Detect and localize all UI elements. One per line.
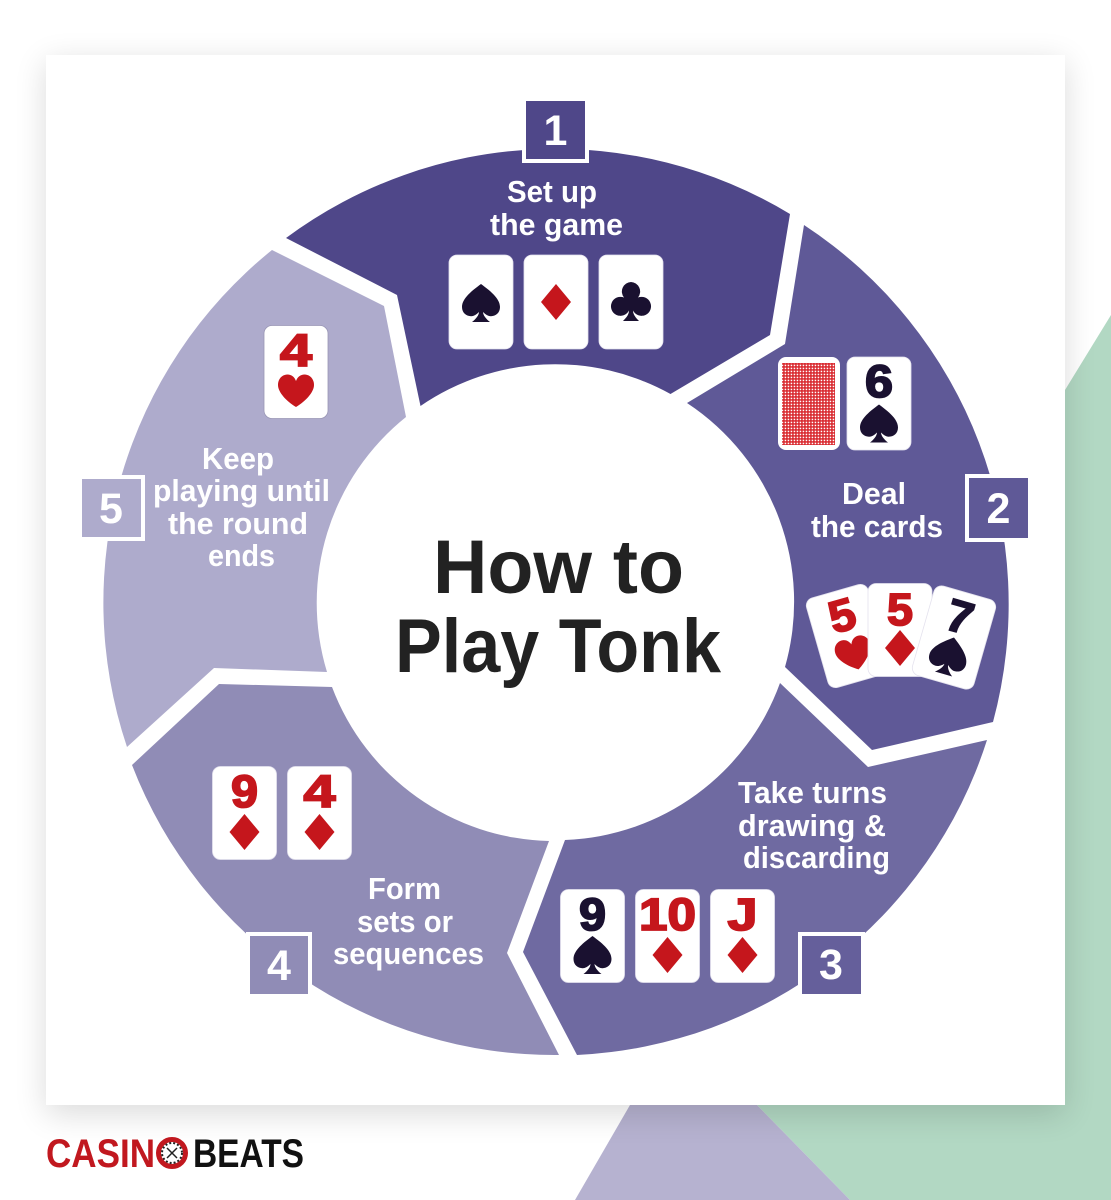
card: 9 of diamonds: 9 [231,766,258,817]
step 4 number badge [248,934,310,996]
panel: step 2 segment [687,225,1009,750]
step 5 number badge [80,477,143,539]
card: 9 of spades: 9 [579,889,606,940]
card: 7 of spades, fanned: 7 [940,589,979,645]
label: step 3: Take turns [738,776,887,810]
card: 9 of diamonds [212,766,276,860]
label: step 4: sequences [333,937,484,971]
label: step 5 [153,442,330,573]
label: step 5: playing until [153,474,330,508]
card: spade suit [449,255,513,349]
label: step 3: discarding [743,841,890,875]
card: 4 of diamonds: 4 [304,766,336,817]
label: step 1 [490,175,623,242]
label: step 5: ends [208,539,275,573]
step 3 number badge [800,934,863,996]
label: step 4: Form [368,872,441,906]
title: Play Tonk [395,604,722,689]
step 5 number badge: 5 [99,485,123,533]
step 2 number badge: 2 [987,485,1010,533]
label: step 3 [738,776,890,875]
panel: step 3 segment [523,683,987,1055]
logo: CasinoBeats: BEATS [193,1132,304,1176]
panel: step 1 segment [286,149,790,406]
background shape: green [700,315,1111,1200]
card: jack of diamonds [710,889,774,982]
label: step 2 [811,477,943,544]
label: step 5: the round [168,507,308,541]
card: 5 of hearts, fanned [804,582,892,690]
logo: CasinoBeats: CASIN [46,1132,155,1176]
card: 5 of diamonds, fanned [868,584,932,676]
label: step 1: Set up [507,175,597,209]
card: 10 of diamonds [636,889,700,982]
card: 4 of hearts [264,325,328,418]
card: diamond suit [524,255,588,349]
step 4 number badge: 4 [267,942,291,990]
card: jack of diamonds: J [728,889,757,940]
card: 10 of diamonds: 10 [639,889,696,940]
step 2 number badge [967,476,1030,540]
card: 4 of hearts: 4 [280,325,312,376]
card: 4 of diamonds [288,766,352,860]
panel: step 5 segment [103,250,406,747]
logo: CasinoBeats [46,1132,304,1176]
card: face-down deck back [778,357,840,450]
background shape: lavender [575,1105,850,1200]
label: step 2: Deal [842,477,906,511]
label: step 5: Keep [202,442,274,476]
step 3 number badge: 3 [819,941,843,989]
label: step 4: sets or [357,905,453,939]
label: step 2: the cards [811,510,943,544]
panel: step 4 segment [132,684,559,1055]
card: 9 of spades [560,889,624,982]
card: 6 of spades: 6 [865,356,893,407]
card: 7 of spades, fanned [910,584,998,691]
label: step 1: the game [490,208,623,242]
label: step 4 [333,872,484,971]
label: step 3: drawing & [738,809,886,843]
title [395,525,722,689]
title: How to [433,525,684,610]
step 1 number badge: 1 [544,107,567,155]
card: 6 of spades [847,356,911,450]
step 1 number badge [524,99,587,161]
card: 5 of diamonds, fanned: 5 [887,584,913,635]
card: 5 of hearts, fanned: 5 [823,587,862,643]
card: club suit [599,255,663,349]
